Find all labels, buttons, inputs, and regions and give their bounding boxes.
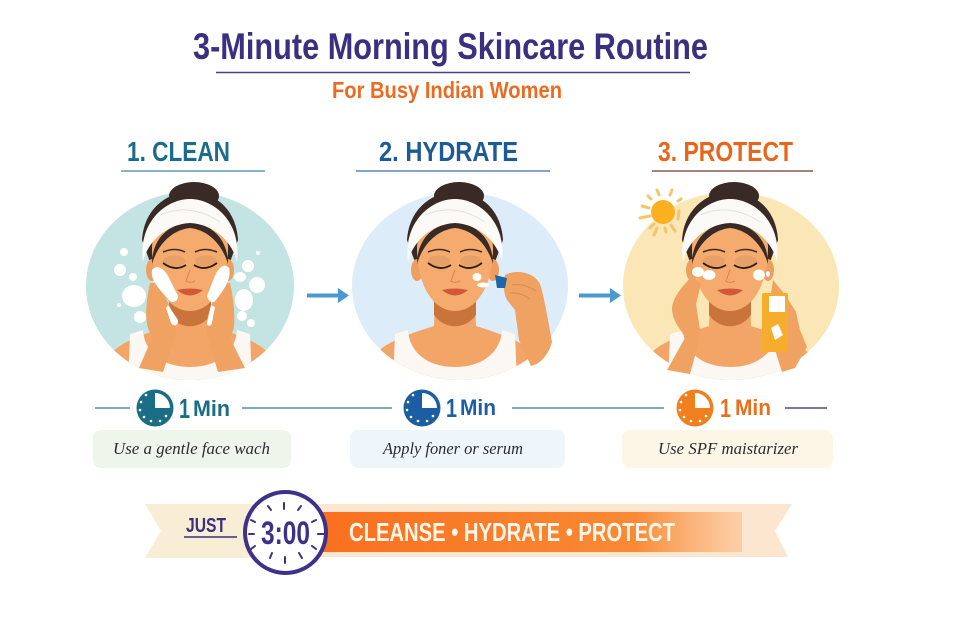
caption 1: Use a gentle face wach: [113, 439, 270, 458]
caption 2: [350, 430, 565, 468]
timer 1 minute: protect: [676, 390, 771, 426]
timer 1 minute: clean: Min: [193, 396, 230, 421]
timer 1 minute: protect: 1: [720, 393, 731, 423]
timer 1 minute: clean: [136, 390, 230, 426]
step 2 heading: 2. HYDRATE: [379, 136, 518, 167]
title: 3-Minute Morning Skincare Routine: [193, 26, 708, 67]
illustration: woman applying sunscreen: [623, 182, 839, 382]
icon: sun: [640, 190, 681, 235]
orange bar: [320, 512, 742, 552]
timer 1 minute: clean: 1: [179, 393, 190, 424]
subtitle: For Busy Indian Women: [332, 77, 562, 103]
timer 1 minute: hydrate: [404, 390, 496, 426]
caption 3: Use SPF maistarizer: [658, 439, 798, 458]
caption 2: Apply foner or serum: [382, 439, 523, 458]
banner: [145, 492, 792, 573]
banner message: CLEANSE • HYDRATE • PROTECT: [349, 517, 675, 547]
hand with serum dropper: [472, 272, 552, 366]
timer 1 minute: hydrate: 1: [446, 393, 457, 423]
timer 1 minute: hydrate: Min: [460, 395, 496, 420]
arrow 2: [579, 288, 621, 303]
clock 3:00: 3:00: [261, 515, 310, 551]
step 3 heading: 3. PROTECT: [658, 136, 793, 167]
just label: JUST: [186, 515, 226, 537]
timer 1 minute: protect: Min: [735, 395, 771, 420]
ribbon right: [310, 504, 792, 557]
illustration: woman cleansing with foam: [86, 182, 294, 382]
ribbon left: [145, 504, 260, 558]
hands with foam: [139, 266, 245, 372]
hands with cream and bottle: [667, 267, 807, 374]
timeline line: [95, 407, 827, 409]
illustration: woman applying serum: [352, 182, 568, 382]
clock 3:00: [245, 492, 326, 573]
arrow 1: [307, 288, 349, 303]
caption 3: [622, 430, 833, 468]
step 1 heading: 1. CLEAN: [127, 136, 230, 167]
caption 1: [93, 430, 291, 468]
